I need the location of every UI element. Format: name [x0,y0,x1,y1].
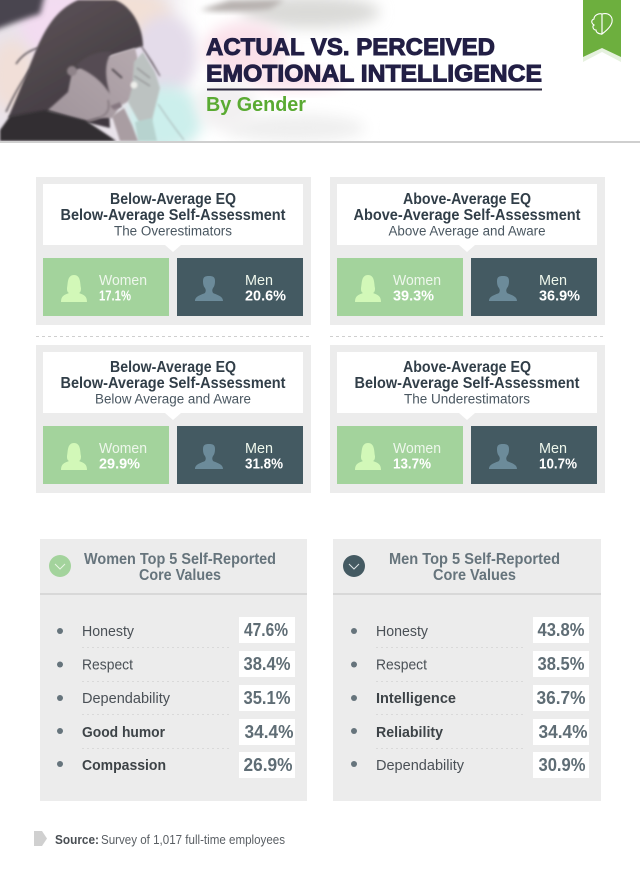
row: dependability: Dependability [376,758,465,774]
men tile: Men [539,273,567,289]
icon: dark chevron circle [343,555,365,577]
icon: green ribbon with brain and heart [583,0,621,62]
source note: Source: [55,833,99,847]
women tile [43,258,169,316]
row: respect: Respect [376,658,427,674]
panel heading: The Overestimators [114,224,232,238]
title underline [207,88,542,90]
row: dependability [57,685,295,711]
row: respect: Respect [82,658,133,674]
panel heading [354,359,580,406]
row: honesty: Honesty [376,624,429,640]
row: dependability: 30.9% [538,755,586,775]
row: good humor [57,719,295,745]
panel heading [84,551,276,584]
panel heading [60,359,286,406]
panel heading [60,191,286,238]
women tile: 13.7% [393,456,431,472]
panel heading: Below-Average Self-Assessment [60,207,286,224]
panel heading: Above-Average Self-Assessment [354,207,580,224]
men tile: Men [245,273,273,289]
women tile: Women [393,273,441,289]
row: respect: 38.4% [244,654,290,674]
row: reliability: Reliability [376,725,443,741]
panel heading: Men Top 5 Self-Reported [389,551,560,568]
women tile: Women [99,273,147,289]
men tile [177,258,303,316]
men tile: Men [539,441,567,457]
women tile: Women [99,441,147,457]
row: dependability: Dependability [82,691,171,707]
panel: men core values [333,539,601,801]
row: respect [351,651,589,677]
row: intelligence [351,685,589,711]
panel heading: Below-Average Self-Assessment [60,375,286,392]
women tile [337,426,463,484]
row: honesty: Honesty [82,624,135,640]
panel heading: Above Average and Aware [388,224,546,238]
title: ACTUAL VS. PERCEIVED [206,34,495,61]
women tile [337,258,463,316]
men tile: 10.7% [539,456,577,472]
row: compassion: Compassion [82,758,166,774]
icon: green chevron circle [49,555,71,577]
panel heading: Above-Average EQ [403,359,531,376]
header bottom rule [0,141,640,143]
row: honesty [351,617,589,643]
row: compassion [57,752,295,778]
row: honesty: 43.8% [538,620,584,640]
panel: overestimators [36,177,311,325]
panel heading: Below-Average EQ [110,191,236,208]
men tile: Men [245,441,273,457]
panel heading: Core Values [433,567,516,584]
row: reliability: 34.4% [538,722,588,742]
subtitle: By Gender [206,94,306,116]
panel heading: Women Top 5 Self-Reported [84,551,276,568]
panel: women core values [40,539,307,801]
row: good humor: Good humor [82,725,165,741]
row: intelligence: 36.7% [536,688,586,708]
women tile: 29.9% [99,456,140,472]
panel: below average and aware [36,345,311,493]
row: respect [57,651,295,677]
header illustration: woman with hand on forehead over watercolor background [0,0,382,141]
men tile: 20.6% [245,288,286,304]
row: good humor: 34.4% [244,722,294,742]
panel heading [389,551,560,584]
row: honesty: 47.6% [244,620,288,640]
panel heading [354,191,580,238]
men tile: 36.9% [539,288,580,304]
row: compassion: 26.9% [244,755,292,775]
title [206,34,542,88]
source note: Survey of 1,017 full-time employees [101,833,285,847]
icon: source marker [34,831,47,846]
panel heading: Above-Average EQ [403,191,531,208]
women tile: Women [393,441,441,457]
row: dependability: 35.1% [244,688,290,708]
panel heading: Core Values [139,567,221,584]
panel heading: The Underestimators [404,392,530,406]
women tile: 17.1% [99,288,131,304]
men tile: 31.8% [245,456,283,472]
row: intelligence: Intelligence [376,691,456,707]
panel: above average and aware [330,177,605,325]
row: respect: 38.5% [538,654,584,674]
men tile [471,426,597,484]
row: reliability [351,719,589,745]
women tile [43,426,169,484]
women tile: 39.3% [393,288,434,304]
panel heading: Below Average and Aware [95,392,251,406]
panel heading: Below-Average Self-Assessment [354,375,580,392]
panel heading: Below-Average EQ [110,359,236,376]
men tile [471,258,597,316]
row: honesty [57,617,295,643]
title: EMOTIONAL INTELLIGENCE [206,60,542,88]
row: dependability [351,752,589,778]
men tile [177,426,303,484]
panel: underestimators [330,345,605,493]
